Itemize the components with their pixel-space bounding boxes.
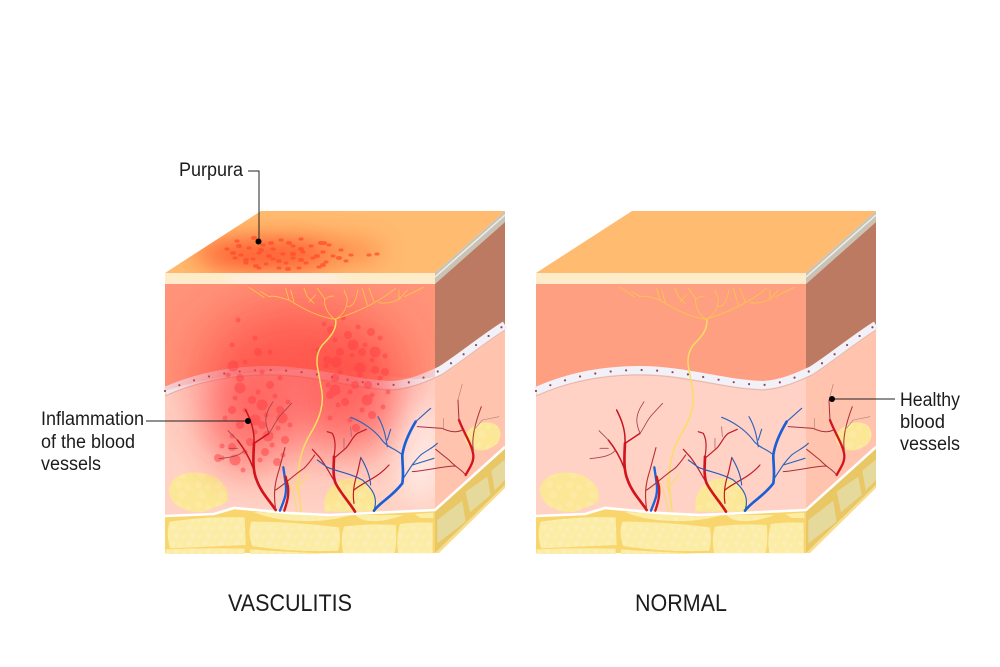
panel: normal skin cube	[536, 211, 876, 554]
healthy text: vessels	[900, 434, 960, 455]
surface redness	[185, 236, 385, 268]
healthy blood vessels and nerve	[590, 287, 870, 512]
caption: normal: NORMAL	[635, 590, 727, 617]
purpura leader line	[248, 171, 259, 241]
skin layers of the normal block	[536, 211, 876, 554]
healthy text: Healthy	[900, 390, 960, 411]
healthy leader line	[832, 398, 895, 400]
caption: vasculitis: VASCULITIS	[228, 590, 352, 617]
purpura spots on the surface	[226, 238, 378, 269]
panel: vasculitis skin cube	[165, 211, 505, 554]
healthy leader dot	[829, 396, 835, 402]
label: purpura	[179, 160, 262, 244]
healthy text: blood	[900, 412, 945, 433]
inflammation text: of the blood	[41, 432, 135, 453]
purpura text: Purpura	[179, 160, 243, 181]
skin layers of the vasculitis block	[165, 211, 505, 554]
inflammation text: vessels	[41, 454, 101, 475]
inflammation leader dot	[245, 418, 251, 424]
purpura leader dot	[256, 238, 262, 244]
epidermis band flush	[230, 273, 340, 284]
blood vessels and nerve	[219, 287, 499, 512]
inflamed spots in dermis	[218, 318, 388, 470]
inflammation leader line	[146, 420, 248, 422]
inflammation text: Inflammation	[41, 409, 144, 430]
label: healthy blood vessels	[829, 390, 965, 455]
label: inflammation of the blood vessels	[41, 409, 251, 475]
inflamed dermis glow	[165, 284, 442, 500]
